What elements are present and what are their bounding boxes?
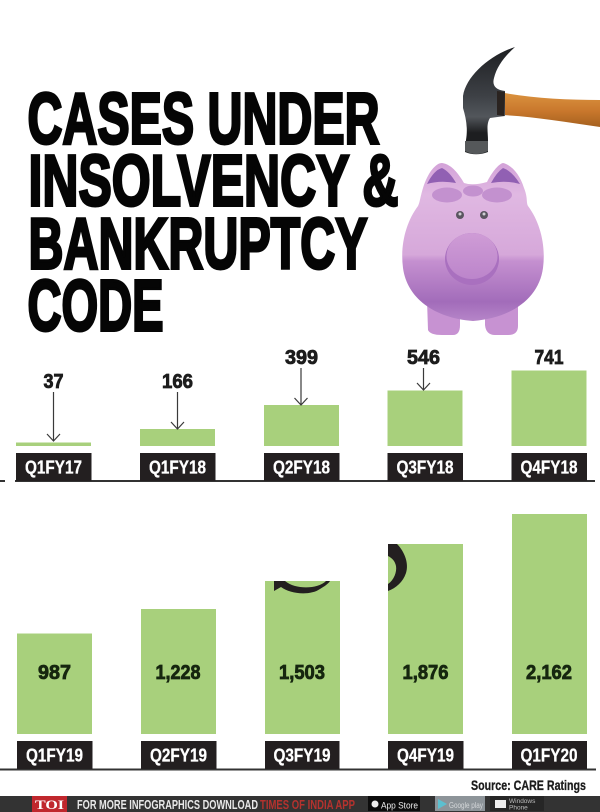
bar: Q1FY19: 987 <box>38 661 71 684</box>
bar: Q1FY19: Q1FY19 <box>26 744 83 766</box>
pig forehead patches <box>432 186 512 202</box>
google play badge <box>435 796 485 811</box>
bar: Q3FY19 <box>265 581 340 769</box>
bar: Q3FY19: Q3FY19 <box>274 744 330 766</box>
bar: Q1FY20: 2,162 <box>526 661 572 684</box>
footer message: FOR MORE INFOGRAPHICS DOWNLOAD <box>77 797 258 812</box>
title: CODE <box>28 266 164 346</box>
icon: piggy bank <box>402 163 544 335</box>
icon fragment: coin crescent <box>388 544 407 591</box>
bar: Q1FY18: 166 <box>162 370 193 393</box>
pig inner ears <box>427 168 520 184</box>
windows phone badge: Phone <box>509 804 528 812</box>
bar: Q2FY18: 399 <box>285 346 318 369</box>
bar: Q4FY19: 1,876 <box>402 661 448 684</box>
bar: Q1FY18 <box>140 370 216 481</box>
title <box>28 78 398 346</box>
bar: Q1FY20 <box>512 514 587 769</box>
windows phone badge: Windows <box>509 798 536 805</box>
bar: Q1FY17: Q1FY17 <box>25 456 82 478</box>
bar: Q2FY19: Q2FY19 <box>150 744 207 766</box>
bar: Q3FY18 <box>388 346 463 481</box>
bar: Q4FY19: Q4FY19 <box>397 744 454 766</box>
baseline <box>0 768 596 770</box>
bar: Q2FY18 <box>264 346 340 481</box>
bar: Q4FY18 <box>512 346 587 481</box>
bar: Q1FY20: Q1FY20 <box>520 744 578 766</box>
icon: hammer <box>463 47 600 154</box>
chart: bottom row FY19-FY20 <box>0 514 596 770</box>
pig body <box>402 163 544 321</box>
pig feet <box>427 300 518 335</box>
title: CASES UNDER <box>28 78 380 160</box>
pig snout <box>445 233 499 285</box>
bar: Q4FY19 <box>388 544 464 769</box>
TOI logo <box>32 796 67 812</box>
pig eyes <box>456 211 488 219</box>
bar: Q3FY19: 1,503 <box>279 661 325 684</box>
bar: Q2FY19: 1,228 <box>156 661 200 684</box>
bar: Q1FY17 <box>16 370 92 481</box>
bar: Q3FY18: Q3FY18 <box>396 456 454 478</box>
bar: Q2FY18: Q2FY18 <box>273 456 330 478</box>
bar: Q2FY19 <box>141 609 216 769</box>
bar: Q4FY18: 741 <box>534 346 564 369</box>
bar: Q3FY18: 546 <box>407 346 440 369</box>
title: BANKRUPTCY <box>28 204 368 284</box>
baseline <box>0 480 595 482</box>
bar: Q1FY19 <box>17 634 92 769</box>
title: INSOLVENCY & <box>28 140 398 222</box>
app store badge <box>368 796 420 812</box>
bar: Q1FY17: 37 <box>44 370 64 393</box>
bar: Q4FY18: Q4FY18 <box>520 456 578 478</box>
TOI logo: TOI <box>35 797 64 812</box>
windows phone badge <box>490 796 544 812</box>
icon fragment: coin arc <box>274 581 330 593</box>
google play badge: Google play <box>449 801 483 810</box>
app store badge: App Store <box>381 800 418 812</box>
footer app name: TIMES OF INDIA APP <box>260 797 355 812</box>
bar: Q1FY18: Q1FY18 <box>149 456 206 478</box>
chart: top row FY17-FY18 <box>0 346 595 481</box>
footer bar <box>0 796 600 812</box>
